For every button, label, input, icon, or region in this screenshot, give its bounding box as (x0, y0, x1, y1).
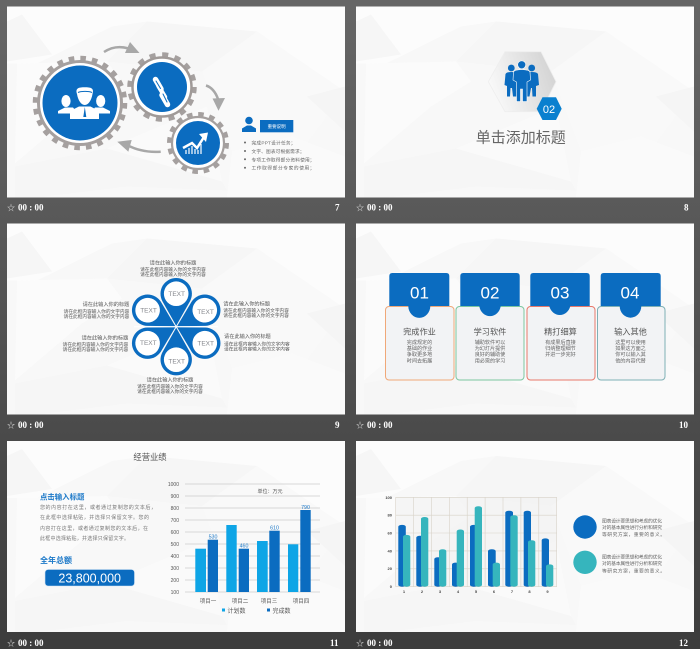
footer: slide 10: 10 (679, 420, 688, 430)
bar chart: 0 (390, 584, 393, 589)
arrow: top (104, 42, 140, 53)
text block: lower right (224, 332, 290, 352)
bar chart: 460 (240, 543, 248, 549)
bar chart: 40 (388, 548, 393, 553)
text block: paragraph: 此框中选择粘贴，并选择只保留文字。 (40, 535, 129, 542)
text block: upper left: 请在此框内容输入你的文字内容 (64, 308, 130, 315)
circle labels: TEXT (197, 341, 214, 348)
card 04: 他的内容代替 (615, 357, 646, 364)
title: 单击添加标题 (476, 130, 566, 146)
icon: person (242, 117, 256, 132)
panel: slide 7 gears (7, 6, 345, 198)
text block: top: 请在此框内容输入你的文字内容 (140, 271, 206, 278)
text block: upper left (64, 300, 130, 320)
icon: three people (504, 61, 539, 102)
footer: slide 11: 00 : 00 (18, 638, 44, 648)
text block: upper right (223, 300, 289, 319)
text block: upper right: 请在此框内容输入你的文字内容 (223, 307, 289, 314)
text block: lower left (63, 334, 129, 353)
footer: slide 11: ☆ (7, 639, 15, 648)
arrow: bottom (117, 140, 161, 152)
card 01: 时间去拓展 (407, 357, 432, 364)
bar chart: 5 (475, 589, 478, 594)
footer: slide 9: 9 (335, 420, 340, 430)
text block: lower right: 请在此框内容输入你的文字内容 (224, 345, 290, 352)
text block: bottom: 请在此输入你的标题 (147, 376, 193, 384)
badge: 02: 02 (543, 104, 555, 116)
icon: small gear with rising chart (170, 114, 226, 172)
heading: total: 全年总额 (40, 555, 72, 565)
circle labels: TEXT (168, 358, 185, 365)
footer: slide 12: 00 : 00 (367, 638, 393, 648)
footer: slide 12 (356, 638, 688, 648)
bar chart: 100 (385, 495, 393, 500)
legend item: blue: 图表设计要思想和考虑的优化 (602, 518, 662, 524)
card 04: 你可以输入其 (615, 351, 646, 358)
card 01: 完成作业 (403, 326, 436, 336)
bar chart: 项目二 (232, 598, 249, 605)
total value (45, 570, 134, 586)
legend: 完成数 (272, 607, 291, 615)
legend: 计划数 (228, 607, 246, 615)
bar chart: 项目三 (261, 598, 278, 605)
bar chart: 500 (171, 542, 179, 548)
legend item: blue: 对的基本属性进行分析和研究 (602, 524, 662, 531)
text block: bullet list: 完成PPT设计任务； (252, 140, 296, 146)
bar chart: 530 (209, 534, 217, 540)
bar chart (168, 482, 320, 615)
bar chart: 790 (301, 505, 310, 511)
footer: slide 8: 00 : 00 (367, 202, 393, 212)
card 01: 基础的作业 (407, 345, 432, 352)
text block: bottom: 请在此框内容输入你的文字内容 (137, 388, 203, 395)
text block: lower left: 请在此输入你的标题 (82, 334, 128, 342)
footer: slide 10: 00 : 00 (367, 420, 393, 430)
text block: lower left: 请在此框内容输入你的文字内容 (63, 346, 129, 353)
card 02 (456, 273, 524, 380)
text block: paragraph: 内容打在这里，或者通过复制您的文本后，在 (40, 525, 148, 532)
circle labels: TEXT (140, 307, 157, 314)
card 03: 归纳整理细节 (545, 345, 576, 352)
arrow: right (206, 86, 225, 111)
panel: slide 11 performance (7, 441, 345, 632)
card 03: 并进一步完好 (545, 351, 576, 358)
bar chart: 8 (528, 589, 531, 594)
bar chart: 7 (511, 589, 514, 594)
card 04: 如果这方面之 (615, 345, 646, 352)
icon: grey hexagon (488, 52, 556, 112)
bar chart: 400 (171, 554, 179, 560)
text block: lower right: 请在此输入你的标题 (224, 332, 271, 340)
card 01: 完成规定的 (407, 339, 432, 346)
circle labels: TEXT (168, 291, 185, 298)
card 01: 01 (410, 284, 429, 302)
footer: slide 7: 7 (335, 202, 340, 212)
bar chart: 80 (388, 513, 393, 518)
text block: paragraph (40, 504, 156, 542)
heading: 点击输入标题 (40, 492, 85, 502)
bar chart: 700 (171, 518, 179, 524)
text block: top (140, 258, 206, 278)
slide 7 background (7, 6, 345, 198)
legend item: teal (573, 551, 665, 574)
label: important note (260, 120, 293, 132)
bar chart: 60 (388, 530, 393, 536)
card 04 (598, 273, 665, 380)
text block: lower right: 请在此框内容输入你的文字内容 (224, 340, 290, 347)
slide 8 background (356, 6, 694, 198)
bar chart: 4 (457, 589, 460, 594)
footer: slide 8: 8 (684, 202, 689, 212)
slide 12 background (356, 441, 694, 632)
card 02: 为幻灯片提供 (475, 345, 505, 352)
text block: bottom: 请在此框内容输入你的文字内容 (137, 383, 203, 390)
text block: paragraph: 在此框中选择粘贴，并选择只保留文字。您的 (40, 514, 149, 521)
label: important note: 重要说明 (268, 123, 286, 130)
legend item: teal: 等研究方案，重要的意义。 (602, 568, 665, 574)
card 02: 辅助软件可以 (475, 339, 505, 346)
text block: bullet list (244, 140, 314, 172)
badge: 02 (537, 97, 562, 120)
bar chart: 600 (171, 530, 179, 536)
bar chart: 300 (171, 566, 179, 572)
legend (222, 607, 291, 615)
bar chart: 3 (439, 589, 442, 594)
title: 经营业绩 (133, 452, 167, 462)
diagram: six petals (126, 278, 226, 375)
bar chart: 6 (493, 589, 496, 594)
text block: bullet list: 专项工作取得部分资料使用； (252, 156, 314, 163)
card 04: 输入其他 (614, 326, 647, 336)
footer: slide 8: ☆ (356, 204, 364, 212)
legend item: blue (573, 515, 665, 539)
card 03: 03 (551, 284, 569, 302)
slide 9 background (7, 224, 345, 414)
text block: bullet list: 文字、图表可根据需求； (252, 148, 304, 155)
panel: slide 8 section title (356, 6, 694, 198)
circle labels (140, 291, 214, 365)
bar chart: 9 (546, 589, 549, 594)
bar chart (385, 495, 557, 594)
legend item: blue: 等研究方案，重要的意义。 (602, 531, 665, 538)
bar chart: 单位：万元 (257, 488, 283, 495)
footer: slide 12: 12 (679, 638, 688, 648)
bar chart: 2 (421, 589, 424, 594)
bar chart: 1000 (168, 482, 179, 488)
footer: slide 9 (7, 420, 340, 430)
footer: slide 10 (356, 420, 688, 430)
footer: slide 12: ☆ (356, 639, 364, 648)
total value: 23,800,000 (58, 572, 121, 586)
bar chart: 800 (171, 506, 179, 512)
bar chart: 项目四 (293, 598, 309, 605)
card 02: 02 (481, 284, 499, 302)
bar chart: 20 (388, 566, 393, 571)
panel: slide 10 cards (356, 224, 694, 414)
text block: upper right: 请在此框内容输入你的文字内容 (223, 312, 289, 319)
slide 10 background (356, 224, 694, 414)
icon: medium gear with chain (130, 55, 194, 119)
bar chart: 1 (403, 589, 406, 594)
slide 11 background (7, 441, 345, 632)
bar chart: 900 (171, 494, 179, 500)
bar chart: 610 (270, 525, 279, 531)
text block: bottom (137, 376, 203, 395)
text block: lower left: 请在此框内容输入你的文字内容 (63, 341, 129, 348)
card 04: 04 (621, 284, 639, 302)
bar chart: 100 (171, 590, 179, 596)
text block: paragraph: 您的内容打在这里，或者通过复制您的文本后， (40, 504, 156, 511)
card 04: 这里可以使用 (615, 339, 646, 346)
text block: upper right: 请在此输入你的标题 (223, 300, 270, 308)
text block: bullet list: 工作取得部分专家的使用； (252, 165, 314, 172)
card 02: 用必需的学习 (475, 357, 505, 364)
panel: slide 9 petals (7, 224, 345, 414)
bar chart: 项目一 (200, 598, 217, 605)
card 02: 学习软件 (474, 326, 506, 336)
bar chart: 200 (171, 578, 179, 584)
legend item: teal: 对的基本属性进行分析和研究 (602, 560, 662, 567)
circle labels: TEXT (140, 340, 157, 347)
card 01: 争取更多地 (407, 351, 432, 358)
footer: slide 9: 00 : 00 (18, 420, 44, 430)
icon: large gear with team (36, 59, 124, 147)
text block: upper left: 请在此输入你的标题 (83, 300, 129, 308)
card 03: 有成果后直接 (545, 339, 576, 346)
panel: slide 12 cylinder chart (356, 441, 694, 632)
card 03: 精打细算 (544, 326, 577, 336)
card 02: 良好的辅助使 (475, 351, 505, 358)
circle labels: TEXT (197, 309, 214, 316)
text block: top: 请在此框内容输入你的文字内容 (140, 266, 206, 273)
footer: slide 7 (7, 202, 340, 212)
footer: slide 8 (356, 202, 689, 212)
text block: upper left: 请在此框内容输入你的文字内容 (64, 313, 130, 320)
footer: slide 10: ☆ (356, 421, 364, 430)
legend item: teal: 图表设计要思想和考虑的优化 (602, 554, 662, 560)
footer: slide 11: 11 (330, 638, 339, 648)
card 01 (386, 273, 454, 380)
footer: slide 7: ☆ (7, 204, 15, 212)
text block: top: 请在此输入你的标题 (150, 258, 196, 266)
card 03 (527, 273, 595, 380)
footer: slide 9: ☆ (7, 421, 15, 430)
footer: slide 7: 00 : 00 (18, 202, 44, 212)
footer: slide 11 (7, 638, 339, 648)
